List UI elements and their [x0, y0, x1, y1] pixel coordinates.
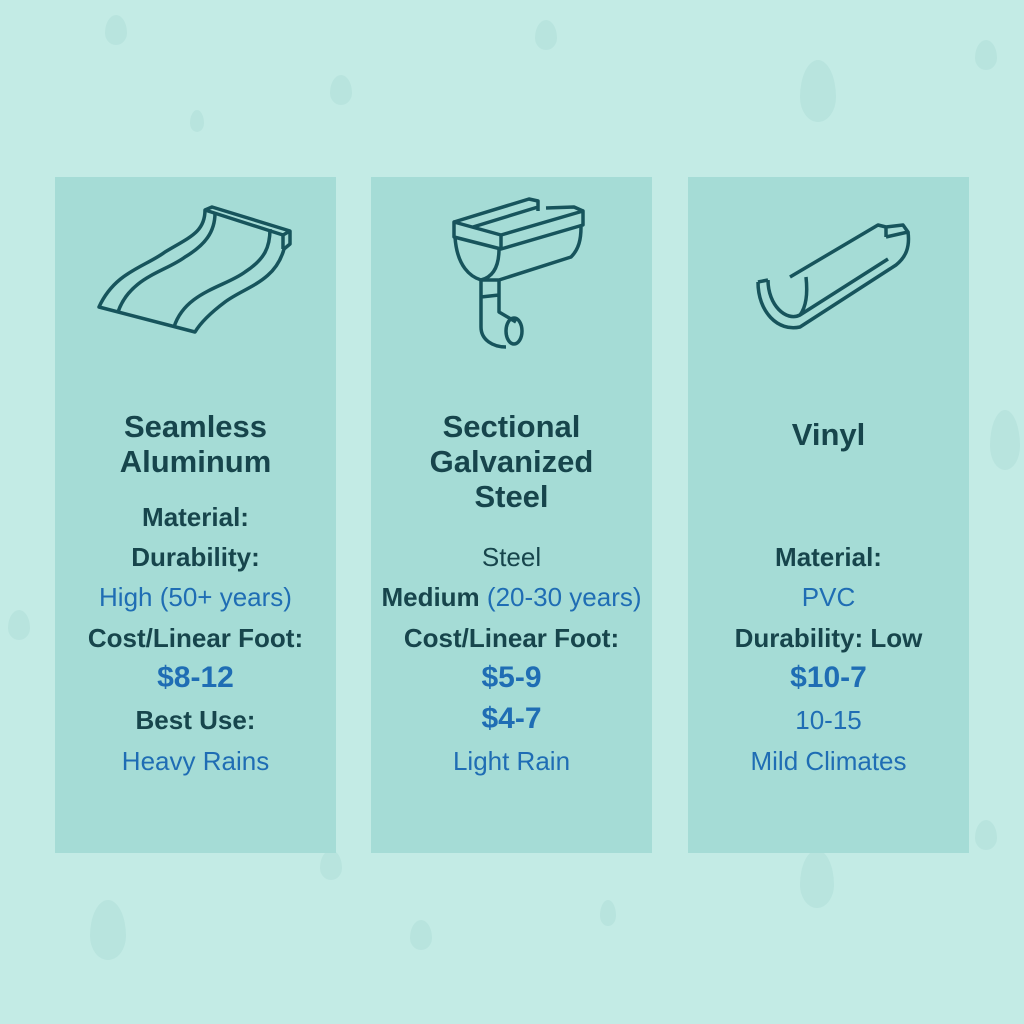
- panel: seamless aluminum: $8-12: [157, 661, 234, 694]
- title: Galvanized: [430, 444, 593, 479]
- details: [381, 542, 642, 776]
- panel: vinyl: Durability: Low: [735, 623, 922, 653]
- panel: vinyl: [688, 177, 969, 853]
- panel: vinyl: Mild Climates: [750, 746, 907, 776]
- panel: seamless aluminum: [55, 177, 336, 853]
- icon: vinyl half-round gutter: [756, 223, 910, 330]
- icon: seamless gutter: [97, 205, 292, 334]
- panel: sectional galvanized steel: Steel: [482, 542, 541, 572]
- title: Aluminum: [120, 444, 271, 479]
- details: [88, 502, 303, 776]
- title: Vinyl: [792, 417, 865, 452]
- panel: sectional galvanized steel: [371, 177, 652, 853]
- title: Seamless: [124, 409, 267, 444]
- panel: sectional galvanized steel: Light Rain: [453, 746, 570, 776]
- title: [430, 409, 593, 514]
- panel: seamless aluminum: Material:: [142, 502, 249, 532]
- panel: seamless aluminum: Best Use:: [136, 705, 255, 735]
- panel: vinyl: PVC: [802, 582, 855, 612]
- title: Steel: [474, 479, 549, 514]
- panel: seamless aluminum: High (50+ years): [99, 582, 292, 612]
- title: Sectional: [443, 409, 580, 444]
- panel: vinyl: Material:: [775, 542, 882, 572]
- title: [120, 409, 271, 479]
- panel: seamless aluminum: Durability:: [131, 542, 260, 572]
- details: [735, 542, 922, 776]
- panel: seamless aluminum: Heavy Rains: [122, 746, 269, 776]
- panel: vinyl: $10-7: [790, 661, 867, 694]
- panel: sectional galvanized steel: Cost/Linear Foot:: [404, 623, 619, 653]
- panel: vinyl: 10-15: [795, 705, 862, 735]
- panel: sectional galvanized steel: $4-7: [481, 702, 542, 735]
- panel: sectional galvanized steel: Medium (20-30 years): [381, 582, 642, 612]
- panel: seamless aluminum: Cost/Linear Foot:: [88, 623, 303, 653]
- panel: sectional galvanized steel: $5-9: [481, 661, 542, 694]
- icon: sectional gutter with downspout: [452, 197, 585, 349]
